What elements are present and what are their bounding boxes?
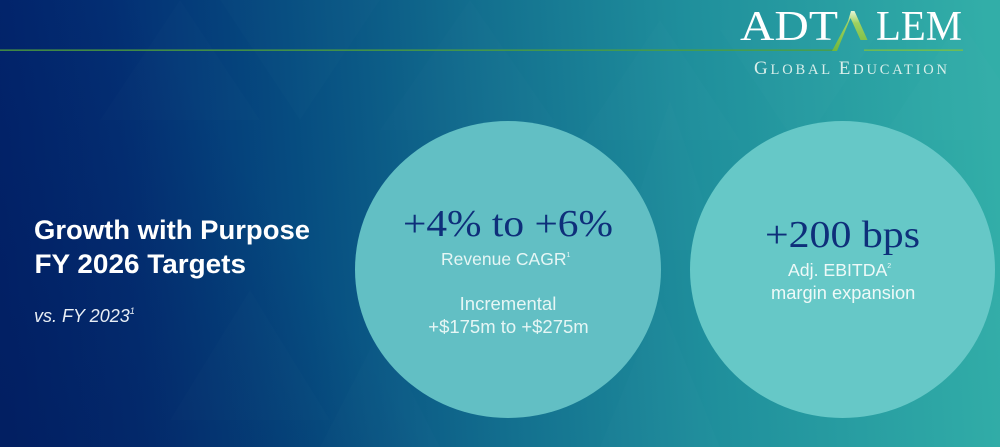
logo: Adtalem Global Education (740, 4, 963, 79)
incremental revenue text: Incremental (460, 293, 556, 314)
panel: revenue target circle (355, 121, 661, 418)
revenue label: Revenue CAGR (441, 249, 566, 269)
incremental revenue text: +$175m to +$275m (428, 316, 589, 337)
logo wordmark: ADT (740, 4, 838, 50)
logo wordmark (740, 4, 962, 50)
logo green peak mark (832, 11, 868, 51)
header rule line (0, 50, 834, 51)
heading: Growth with Purpose FY 2026 Targets: Growth with Purpose (34, 215, 310, 245)
margin label: margin expansion (771, 282, 915, 303)
revenue headline: +4% to +6% (403, 203, 613, 245)
heading: Growth with Purpose FY 2026 Targets (34, 215, 310, 279)
margin label (771, 260, 915, 303)
subheading: vs. FY 2023: vs. FY 2023 (34, 306, 130, 326)
logo subtitle: GLOBAL EDUCATION (754, 58, 948, 79)
margin label: Adj. EBITDA (788, 260, 887, 280)
margin headline: +200 bps (765, 214, 920, 256)
revenue label: 1 (566, 252, 570, 259)
logo underline (864, 50, 963, 51)
panel: margin target circle (690, 121, 995, 418)
logo wordmark: LEM (876, 4, 962, 50)
subheading: vs. FY 2023: 1 (130, 306, 135, 316)
incremental revenue text (428, 293, 589, 337)
margin label: 2 (887, 263, 891, 270)
heading: Growth with Purpose FY 2026 Targets: FY 2026 Targets (34, 249, 246, 279)
